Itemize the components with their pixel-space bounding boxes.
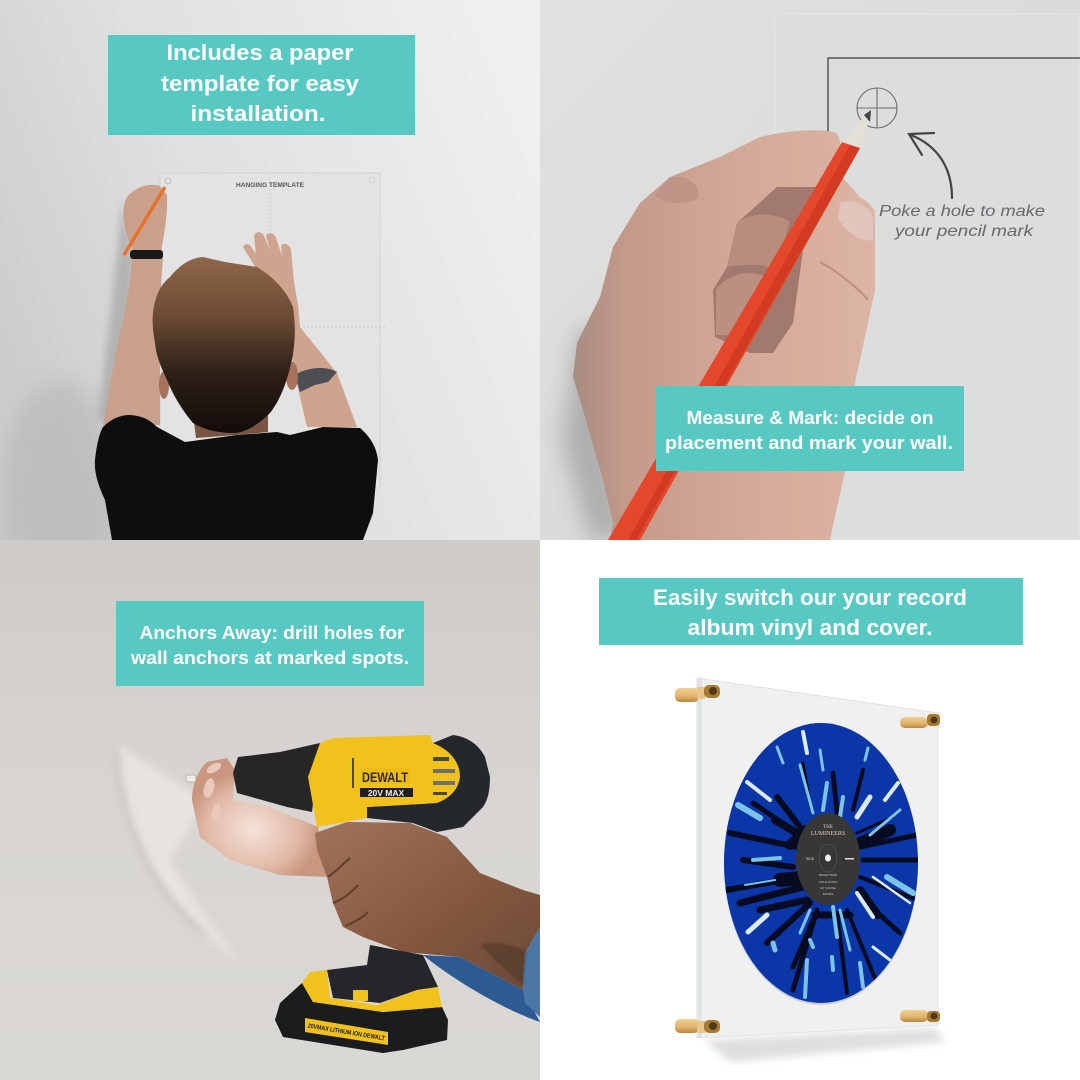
panel: drill photo	[0, 540, 540, 1080]
handle base	[327, 945, 438, 1003]
person: head of brown hair	[153, 257, 298, 438]
person: black shirt	[95, 415, 378, 540]
drill body	[233, 735, 490, 832]
hand	[573, 130, 875, 540]
handwritten note: your pencil mark	[894, 223, 1034, 240]
panel: measure and mark photo	[540, 0, 1080, 540]
panel: paper template photo	[0, 0, 540, 540]
caption: anchors away: Anchors Away: drill holes for	[140, 623, 404, 643]
caption: measure and mark: placement and mark your wall.	[665, 433, 953, 453]
battery	[275, 945, 448, 1053]
yellow housing	[308, 735, 460, 827]
panel: record frame	[599, 578, 1023, 1064]
paper hanging template	[160, 173, 387, 488]
caption: switch record: album vinyl and cover.	[688, 615, 932, 640]
wall dent shading	[122, 750, 222, 944]
hand shadow	[562, 330, 625, 540]
paper hanging template: HANGING TEMPLATE	[236, 182, 305, 189]
arm shadow on wall	[98, 200, 135, 420]
record label: GOLD DOWN	[819, 880, 837, 884]
rear cap	[367, 735, 490, 832]
curved arrow	[909, 133, 952, 198]
sleeve	[423, 927, 540, 1022]
person: left arm and hand with pencil	[103, 185, 167, 425]
caption: measure and mark	[656, 386, 964, 471]
drill body: 20V MAX	[368, 788, 405, 798]
caption: switch record	[599, 578, 1023, 645]
forearm and gripping hand	[315, 822, 540, 990]
caption: switch record: Easily switch our your record	[653, 585, 967, 610]
record label	[796, 813, 860, 905]
translucent paper sheet	[775, 14, 1080, 540]
record label: MY CAUSE	[820, 886, 836, 890]
red pencil	[608, 110, 872, 540]
caption: template: Includes a paper	[166, 40, 354, 65]
battery lower case	[275, 983, 448, 1053]
crosshair target	[857, 88, 897, 128]
caption: anchors away	[116, 601, 424, 686]
acrylic panel	[697, 678, 938, 1038]
caption: template	[108, 35, 415, 135]
black splatter	[727, 763, 917, 993]
record label: ROSES	[823, 892, 833, 896]
handwritten note: Poke a hole to make	[879, 203, 1045, 220]
record label: THE	[823, 825, 833, 830]
gold standoffs	[675, 685, 940, 1033]
handwritten note	[879, 203, 1045, 240]
person: right hand and arm with tattoo	[243, 232, 357, 427]
caption: template: installation.	[190, 101, 326, 126]
frame shadow	[705, 1028, 945, 1062]
battery label	[305, 1018, 388, 1045]
open palm hand	[192, 758, 327, 877]
chuck	[233, 743, 320, 812]
blue and white splatter	[738, 747, 913, 997]
record label: BRIGHTSIDE	[819, 873, 837, 877]
caption: template: template for easy	[161, 71, 360, 96]
battery: 20VMAX LITHIUM ION DEWALT	[307, 1023, 385, 1042]
wall anchor	[186, 775, 196, 782]
record label: SIDE	[806, 857, 815, 861]
caption: measure and mark: Measure & Mark: decide on	[686, 408, 934, 428]
vinyl record	[724, 723, 918, 1005]
record label: LUMINEERS	[811, 831, 845, 837]
battery yellow shell	[302, 970, 442, 1012]
drill body: DEWALT	[362, 770, 409, 785]
caption: anchors away: wall anchors at marked spots.	[130, 648, 409, 668]
